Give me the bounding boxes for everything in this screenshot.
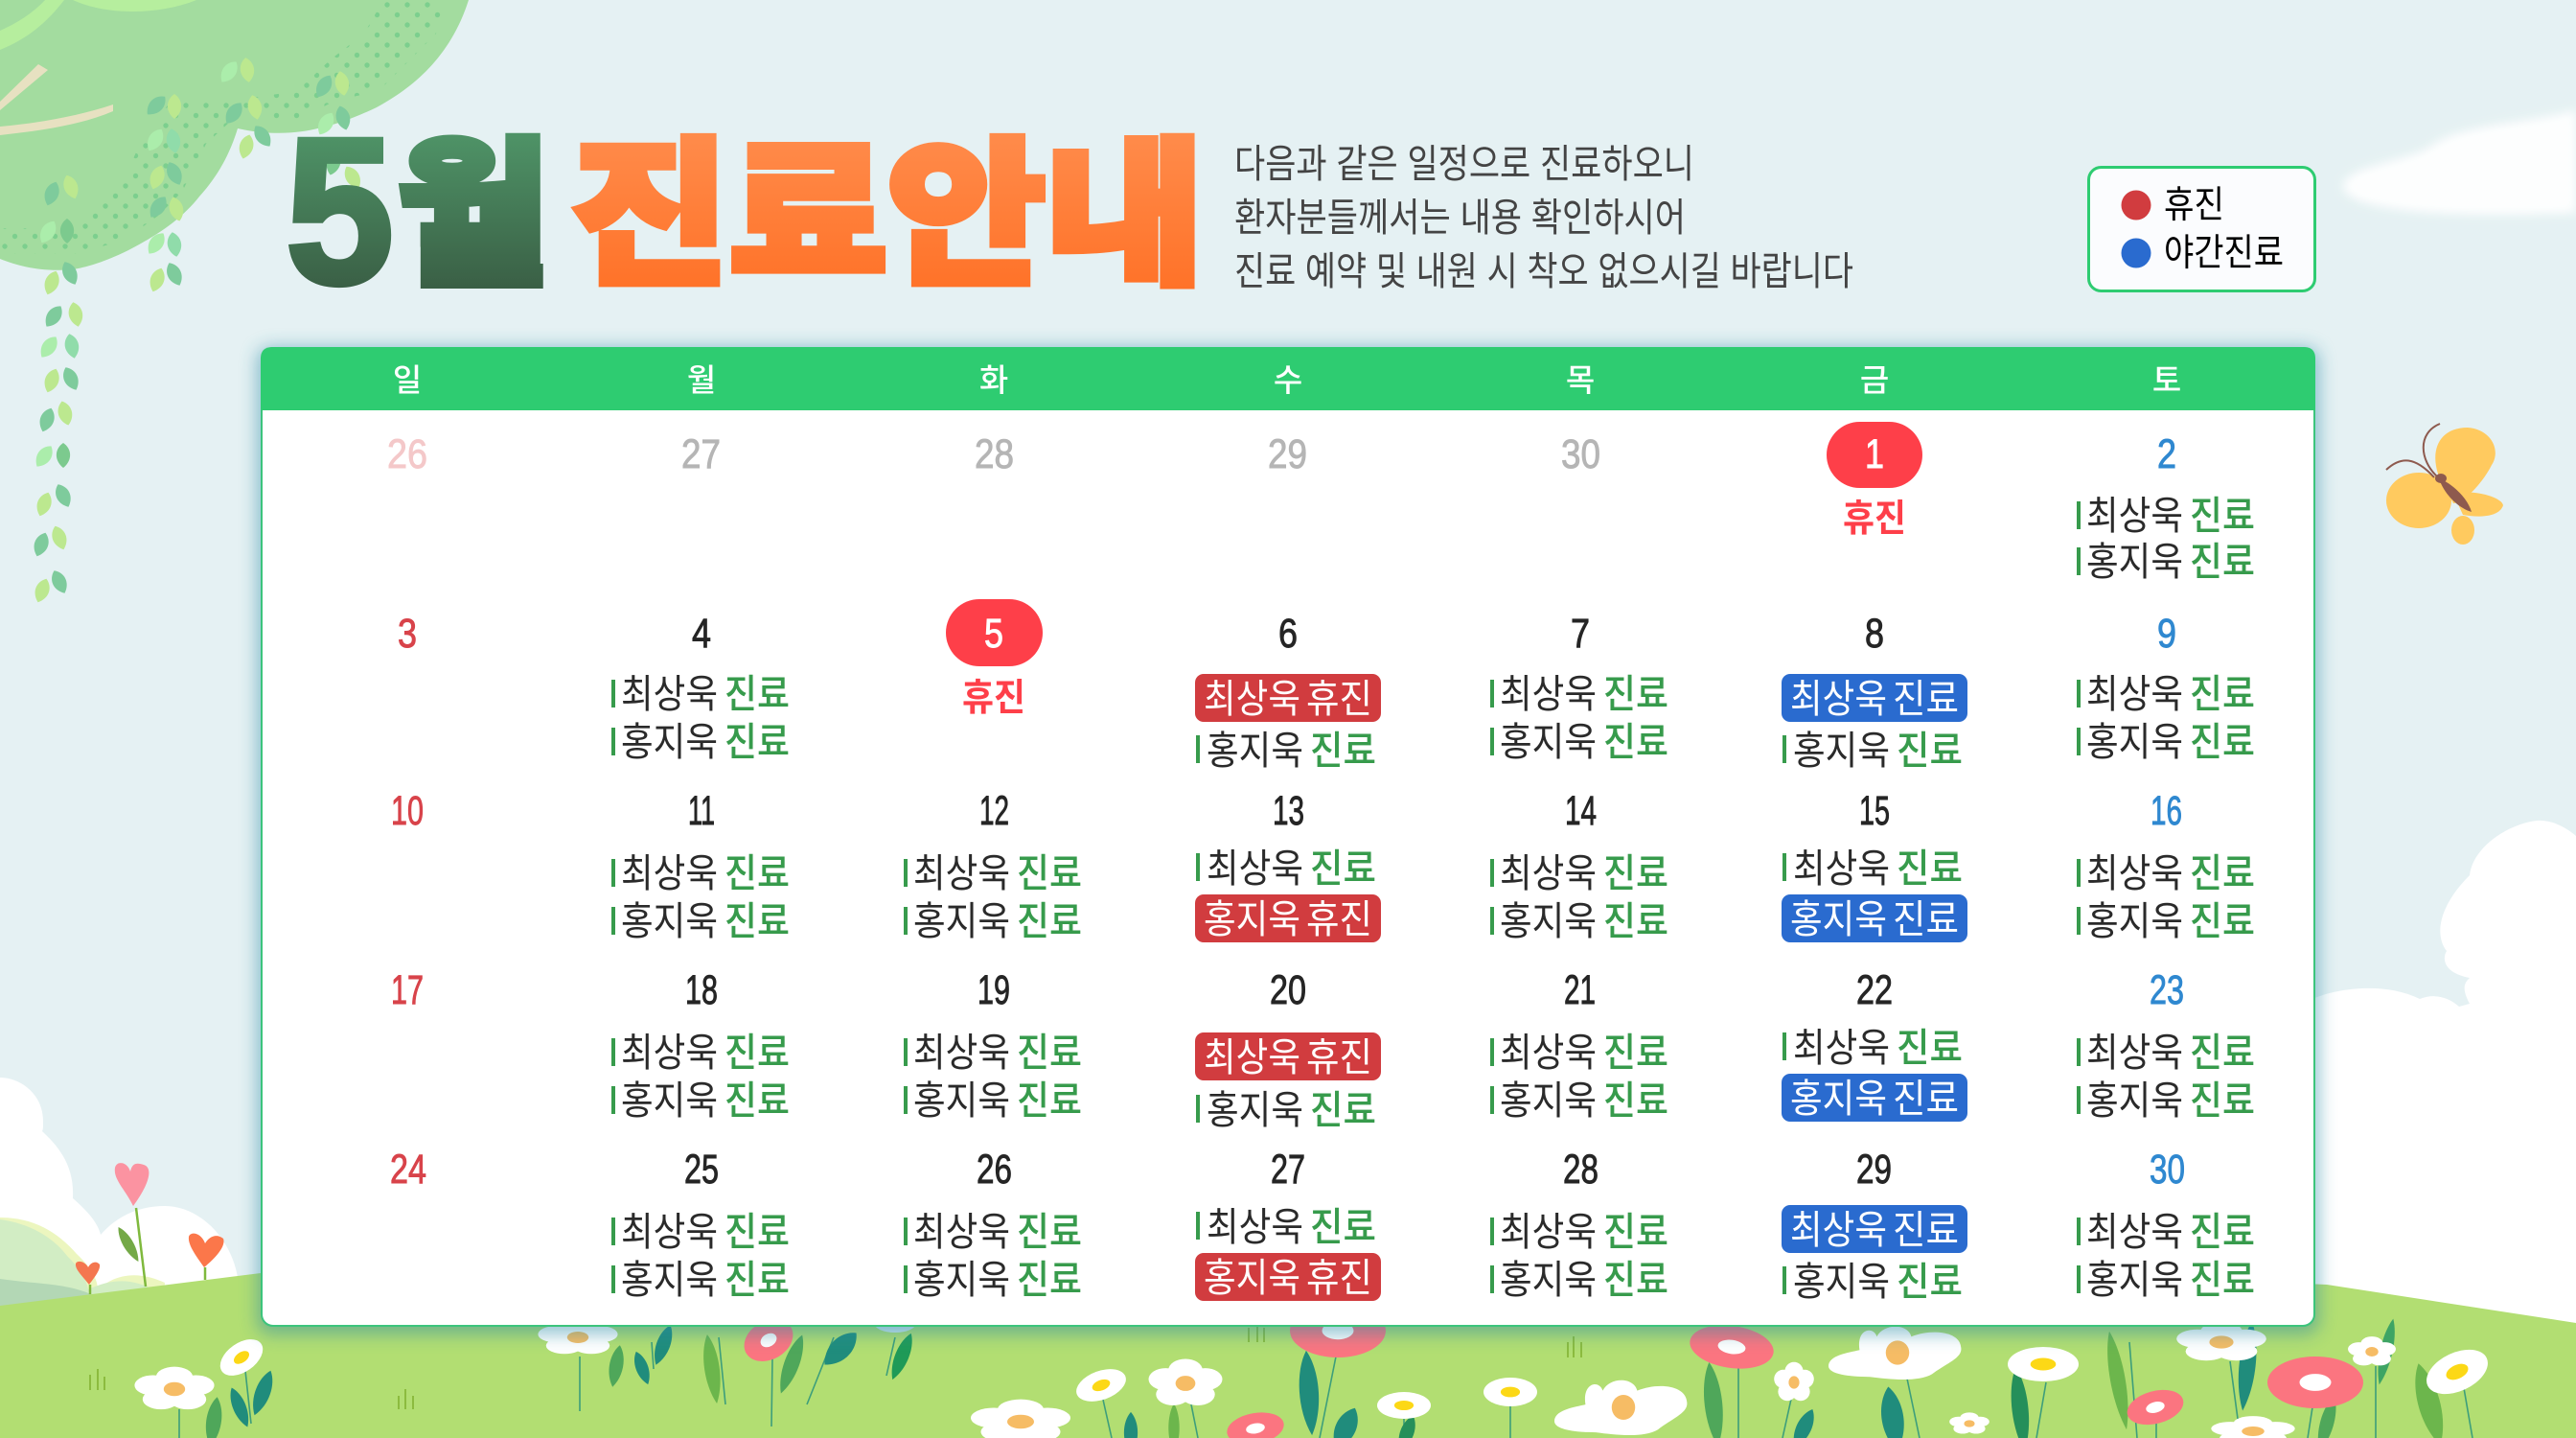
day 12: 홍지욱 [913, 899, 1010, 943]
day 27: 진료 [1310, 1205, 1376, 1249]
day 2: 2 [2157, 431, 2176, 477]
day 21: 21 [1564, 967, 1596, 1013]
day 29 [1782, 1147, 1967, 1304]
day 15: 홍지욱 [1790, 897, 1887, 941]
day 23 [2077, 967, 2255, 1123]
day 16 [2077, 788, 2255, 943]
day 16: 진료 [2190, 851, 2255, 895]
day 29: 최상욱 [1790, 1208, 1887, 1252]
day 8: 홍지욱 [1793, 729, 1890, 773]
day 19: 진료 [1017, 1031, 1082, 1075]
day 14: 진료 [1603, 851, 1668, 895]
title: 월 [397, 128, 550, 304]
flower leaves [203, 1317, 2450, 1438]
day 22 [1782, 967, 1967, 1122]
day 16: 16 [2150, 788, 2182, 834]
day 2: 진료 [2190, 494, 2255, 538]
day 6: 휴진 [1306, 677, 1372, 721]
day 2 [2077, 431, 2255, 584]
day 7: 최상욱 [1500, 672, 1597, 716]
day 15: 진료 [1893, 897, 1959, 941]
day 9: 진료 [2190, 720, 2255, 764]
day 13: 최상욱 [1207, 847, 1303, 891]
day 21: 진료 [1603, 1031, 1668, 1075]
day 8: 8 [1865, 611, 1884, 657]
legend: 휴진 [2164, 185, 2224, 226]
day 4: 최상욱 [621, 672, 718, 716]
day 7 [1490, 611, 1668, 764]
day 21 [1490, 967, 1668, 1123]
day 12: 최상욱 [913, 851, 1010, 895]
day 13: 휴진 [1306, 897, 1372, 941]
day 18: 18 [685, 967, 718, 1013]
row 1: prior month: 29 [1268, 431, 1307, 477]
day 15: 진료 [1897, 847, 1963, 891]
row 1: prior month: 26 [387, 431, 427, 477]
day 18 [611, 967, 790, 1123]
day 20: 최상욱 [1204, 1035, 1300, 1079]
day 20: 홍지욱 [1207, 1088, 1303, 1132]
day 13 [1195, 788, 1381, 942]
day 27: 27 [1271, 1147, 1305, 1193]
day 18: 홍지욱 [621, 1078, 718, 1123]
tree canopy [0, 0, 479, 278]
day 26: 진료 [1017, 1210, 1082, 1254]
day 29: 진료 [1893, 1208, 1959, 1252]
day 9: 9 [2157, 611, 2176, 657]
hanging leaves [31, 57, 365, 605]
day 2: 진료 [2190, 540, 2255, 584]
day 17: 17 [391, 967, 424, 1013]
day 1 closed: 휴진 [1843, 499, 1906, 540]
day 25 [611, 1147, 790, 1302]
flower stems [179, 1337, 2472, 1438]
description text [1234, 142, 1853, 293]
day 16: 진료 [2190, 899, 2255, 943]
row 1: prior month: 28 [975, 431, 1014, 477]
weekday header: 목 [1566, 362, 1595, 398]
day 26 [904, 1147, 1082, 1302]
day 26: 진료 [1017, 1258, 1082, 1302]
day 1 closed: 1 [1865, 431, 1884, 477]
day 30: 홍지욱 [2086, 1258, 2183, 1302]
day 21: 최상욱 [1500, 1031, 1597, 1075]
cloud: right [2300, 821, 2576, 1342]
day 18: 최상욱 [621, 1031, 718, 1075]
day 14: 최상욱 [1500, 851, 1597, 895]
day 12: 12 [979, 788, 1009, 834]
day 22: 진료 [1897, 1026, 1963, 1070]
day 20: 진료 [1310, 1088, 1376, 1132]
day 27: 홍지욱 [1204, 1256, 1300, 1300]
day 25: 최상욱 [621, 1210, 718, 1254]
day 15: 15 [1859, 788, 1890, 834]
day 13: 13 [1273, 788, 1304, 834]
day 19: 최상욱 [913, 1031, 1010, 1075]
day 26: 26 [977, 1147, 1012, 1193]
day 28: 최상욱 [1500, 1210, 1597, 1254]
day 11: 홍지욱 [621, 899, 718, 943]
day 25: 진료 [724, 1258, 790, 1302]
weekday header: 일 [393, 362, 422, 398]
day 14: 진료 [1603, 899, 1668, 943]
day 19: 홍지욱 [913, 1078, 1010, 1123]
day 28: 홍지욱 [1500, 1258, 1597, 1302]
day 11: 진료 [724, 899, 790, 943]
day 29: 29 [1856, 1147, 1892, 1193]
day 12: 진료 [1017, 851, 1082, 895]
day 7: 진료 [1603, 672, 1668, 716]
day 4: 4 [692, 611, 711, 657]
day 19 [904, 967, 1082, 1123]
day 9 [2077, 611, 2255, 764]
day 19: 19 [978, 967, 1010, 1013]
description text: 환자분들께서는 내용 확인하시어 [1234, 196, 1686, 240]
weekday header: 토 [2152, 362, 2181, 398]
day 5 closed: 5 [984, 611, 1003, 657]
day 24: 24 [390, 1147, 426, 1193]
day 26: 홍지욱 [913, 1258, 1010, 1302]
day 22: 홍지욱 [1790, 1077, 1887, 1121]
row 1: prior month: 30 [1561, 431, 1600, 477]
description text: 다음과 같은 일정으로 진료하오니 [1234, 142, 1694, 186]
day 8 [1782, 611, 1967, 773]
title [286, 95, 1204, 327]
calendar card shadow [257, 347, 2319, 1334]
day 2: 홍지욱 [2086, 540, 2183, 584]
day 4: 홍지욱 [621, 720, 718, 764]
day 8: 진료 [1893, 677, 1959, 721]
day 29: 홍지욱 [1793, 1260, 1890, 1304]
day 14: 14 [1565, 788, 1597, 834]
day 8: 진료 [1897, 729, 1963, 773]
day 11 [611, 788, 790, 943]
row 1: prior month: 27 [681, 431, 721, 477]
day 25: 진료 [724, 1210, 790, 1254]
legend [2089, 167, 2315, 291]
flowers [134, 1304, 2495, 1438]
day 21: 홍지욱 [1500, 1078, 1597, 1123]
day 6: 홍지욱 [1207, 729, 1303, 773]
title: 진료안내 [571, 128, 1204, 304]
butterfly [2386, 424, 2503, 545]
weekday header: 화 [979, 362, 1008, 398]
day 16: 홍지욱 [2086, 899, 2183, 943]
weekday header: 월 [687, 362, 716, 398]
day 7: 홍지욱 [1500, 720, 1597, 764]
day 6: 6 [1278, 611, 1298, 657]
weekday header: 수 [1274, 362, 1302, 398]
day 15 [1782, 788, 1967, 942]
day 23: 최상욱 [2086, 1031, 2183, 1075]
day 23: 진료 [2190, 1031, 2255, 1075]
calendar card [261, 347, 2315, 1326]
day 20 [1195, 967, 1381, 1132]
day 23: 23 [2150, 967, 2184, 1013]
row 1: prior month [387, 431, 1600, 477]
day 3: 3 [398, 611, 417, 657]
day 27: 최상욱 [1207, 1205, 1303, 1249]
day 29: 진료 [1897, 1260, 1963, 1304]
day 18: 진료 [724, 1078, 790, 1123]
day 9: 최상욱 [2086, 672, 2183, 716]
day 28: 28 [1563, 1147, 1598, 1193]
day 26: 최상욱 [913, 1210, 1010, 1254]
day 13: 진료 [1310, 847, 1376, 891]
day 28: 진료 [1603, 1258, 1668, 1302]
day 7: 진료 [1603, 720, 1668, 764]
legend: 야간진료 [2164, 233, 2284, 274]
cloud: top right [2343, 110, 2576, 215]
day 10: 10 [391, 788, 424, 834]
heart flowers [76, 1163, 223, 1294]
title: 5 [286, 95, 394, 327]
day 20: 휴진 [1306, 1035, 1372, 1079]
day 6 [1195, 611, 1381, 773]
description text: 진료 예약 및 내원 시 착오 없으시길 바랍니다 [1234, 249, 1853, 293]
day 20: 20 [1270, 967, 1306, 1013]
day 30: 최상욱 [2086, 1210, 2183, 1254]
day 4: 진료 [724, 720, 790, 764]
day 12 [904, 788, 1082, 943]
day 2: 최상욱 [2086, 494, 2183, 538]
day 30: 진료 [2190, 1258, 2255, 1302]
day 4: 진료 [724, 672, 790, 716]
weekday header [261, 347, 2315, 410]
day 6: 최상욱 [1204, 677, 1300, 721]
day 6: 진료 [1310, 729, 1376, 773]
day 12: 진료 [1017, 899, 1082, 943]
day 18: 진료 [724, 1031, 790, 1075]
green ground [0, 1246, 2576, 1438]
weekday header: 금 [1860, 362, 1889, 398]
day 7: 7 [1571, 611, 1590, 657]
day 5 closed [946, 599, 1043, 719]
day 9: 진료 [2190, 672, 2255, 716]
day 23: 홍지욱 [2086, 1078, 2183, 1123]
day 25: 홍지욱 [621, 1258, 718, 1302]
day 9: 홍지욱 [2086, 720, 2183, 764]
day 15: 최상욱 [1793, 847, 1890, 891]
day 16: 최상욱 [2086, 851, 2183, 895]
hills: bottom left [0, 1218, 165, 1323]
day 25: 25 [684, 1147, 719, 1193]
day 11: 진료 [724, 851, 790, 895]
day 11: 11 [688, 788, 715, 834]
day 23: 진료 [2190, 1078, 2255, 1123]
day 22: 22 [1856, 967, 1893, 1013]
day 27: 휴진 [1306, 1256, 1372, 1300]
day 30: 진료 [2190, 1210, 2255, 1254]
day 22: 진료 [1893, 1077, 1959, 1121]
day 13: 홍지욱 [1204, 897, 1300, 941]
day 5 closed: 휴진 [962, 678, 1025, 719]
day 8: 최상욱 [1790, 677, 1887, 721]
day 30: 30 [2150, 1147, 2185, 1193]
day 30 [2077, 1147, 2255, 1302]
day 14: 홍지욱 [1500, 899, 1597, 943]
day 22: 최상욱 [1793, 1026, 1890, 1070]
day 28 [1490, 1147, 1668, 1302]
day 4 [611, 611, 790, 764]
day 28: 진료 [1603, 1210, 1668, 1254]
day 1 closed [1827, 422, 1922, 540]
grass tufts [90, 1326, 1581, 1409]
day 21: 진료 [1603, 1078, 1668, 1123]
day 27 [1195, 1147, 1381, 1301]
cloud: bottom left [0, 1078, 239, 1323]
day 14 [1490, 788, 1668, 943]
day 11: 최상욱 [621, 851, 718, 895]
day 19: 진료 [1017, 1078, 1082, 1123]
